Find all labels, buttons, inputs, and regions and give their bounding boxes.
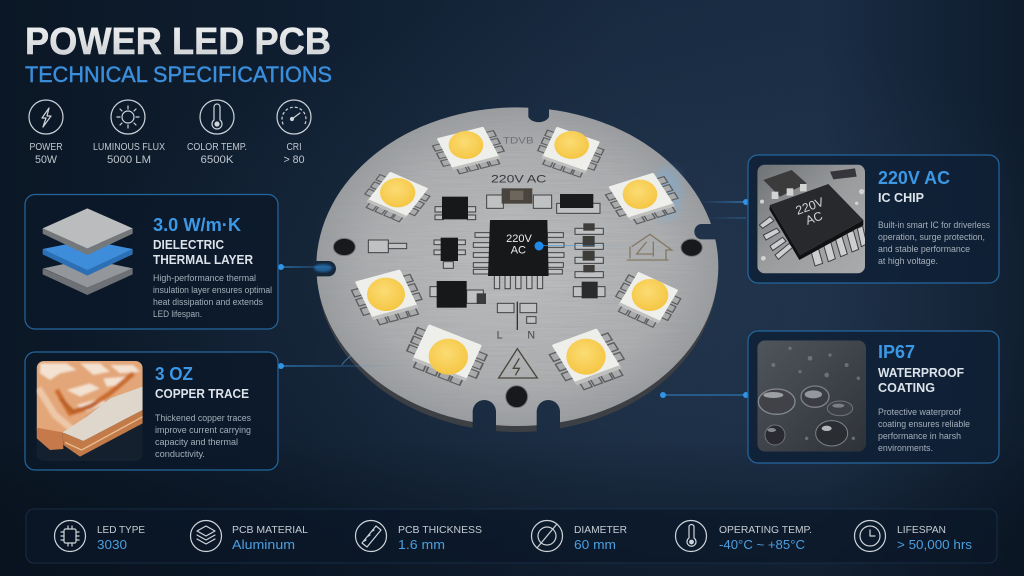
L N labels [497, 329, 535, 341]
board marking: TDVB [503, 135, 534, 145]
description: insulation layer ensures optimal [153, 285, 272, 295]
spec: power [29, 100, 63, 166]
subtitle: TECHNICAL SPECIFICATIONS [25, 62, 332, 87]
panel: waterproof coating: COATING [878, 380, 935, 395]
description [878, 407, 970, 453]
spec: diameter: 60 mm [574, 537, 616, 552]
panel: copper trace: 3 OZ [155, 364, 193, 384]
spec: PCB material: Aluminum [232, 537, 295, 552]
panel: dielectric thermal layer: THERMAL LAYER [153, 252, 254, 267]
description: operation, surge protection, [878, 232, 985, 242]
description [153, 273, 272, 319]
top specifications row [29, 100, 311, 166]
IC chip: AC [511, 244, 526, 256]
L N labels: N [527, 329, 535, 341]
description: High-performance thermal [153, 273, 256, 283]
L N labels: L [497, 329, 503, 341]
LEDs [348, 124, 685, 393]
IC chip: 220V [506, 233, 532, 245]
spec: LED type: LED TYPE [97, 524, 145, 536]
icon: chip [54, 520, 86, 552]
spec: color temperature: COLOR TEMP. [187, 142, 247, 153]
spec: PCB thickness: PCB THICKNESS [398, 524, 482, 536]
description [878, 220, 990, 266]
photo: copper trace [37, 361, 143, 461]
description: Protective waterproof [878, 407, 961, 417]
spec: LED type [54, 520, 145, 552]
house mark [627, 234, 672, 260]
panel: IC chip: 220V AC [878, 168, 950, 188]
panel: IC chip [748, 155, 999, 283]
icon: thermometer [200, 100, 234, 134]
panel: dielectric thermal layer [25, 194, 278, 329]
PCB board [310, 100, 730, 443]
description: conductivity. [155, 449, 205, 459]
title: POWER LED PCB [25, 21, 331, 63]
description: improve current carrying [155, 425, 251, 435]
panel: dielectric thermal layer: 3.0 W/m·K [153, 215, 241, 235]
connector: waterproof coating [660, 392, 749, 398]
spec: PCB thickness [356, 520, 482, 552]
icon: layer stack [43, 208, 133, 295]
icon: sun [111, 100, 145, 134]
description: performance in harsh [878, 431, 961, 441]
description [155, 413, 251, 459]
spec: color temperature: 6500K [200, 154, 234, 166]
spec: PCB thickness: 1.6 mm [398, 537, 445, 552]
blue glow on board [652, 167, 682, 220]
description: environments. [878, 443, 933, 453]
board body [310, 100, 730, 443]
spec: lifespan: LIFESPAN [897, 524, 946, 536]
description: capacity and thermal [155, 437, 238, 447]
description: heat dissipation and extends [153, 297, 263, 307]
icon: thermometer [676, 520, 706, 552]
photo: IC chip: 220V [794, 195, 826, 218]
panel: copper trace: COPPER TRACE [155, 386, 249, 401]
spec: luminous flux: 5000 LM [107, 154, 151, 166]
spec: LED type: 3030 [97, 537, 127, 552]
spec: luminous flux [93, 100, 165, 166]
spec: power: 50W [35, 154, 58, 166]
spec: lifespan [854, 520, 973, 552]
spec: operating temperature: -40°C ~ +85°C [719, 537, 805, 552]
spec: operating temperature: OPERATING TEMP. [719, 524, 812, 536]
connector: IC chip [534, 199, 749, 250]
spec: luminous flux: LUMINOUS FLUX [93, 142, 165, 153]
warning triangle [499, 349, 537, 378]
small components [368, 188, 605, 330]
spec: PCB material: PCB MATERIAL [232, 524, 308, 536]
panel: copper trace [25, 352, 278, 470]
spec: lifespan: > 50,000 hrs [897, 537, 973, 552]
spec: CRI [277, 100, 311, 166]
description: LED lifespan. [153, 309, 202, 319]
spec: CRI: CRI [286, 142, 302, 153]
board label: 220V AC [491, 173, 547, 185]
panel: IC chip: IC CHIP [878, 190, 924, 205]
description: and stable performance [878, 244, 970, 254]
icon: clock [854, 520, 886, 552]
panel: dielectric thermal layer: DIELECTRIC [153, 237, 225, 252]
spec: CRI: > 80 [284, 154, 304, 166]
IC chip [473, 220, 564, 289]
photo: IC chip [757, 165, 867, 273]
description: Built-in smart IC for driverless [878, 220, 990, 230]
description: coating ensures reliable [878, 419, 970, 429]
description: Thickened copper traces [155, 413, 251, 423]
spec: operating temperature [676, 520, 812, 552]
photo: IC chip: AC [804, 209, 825, 228]
connector: dielectric layer [278, 264, 341, 272]
mounting holes [333, 238, 702, 408]
icon: gauge [277, 100, 311, 134]
spec: diameter: DIAMETER [574, 524, 627, 536]
spec: diameter [532, 520, 627, 552]
icon: diameter [532, 520, 562, 552]
panel: waterproof coating: WATERPROOF [878, 365, 964, 380]
description: at high voltage. [878, 256, 938, 266]
panel: waterproof coating: IP67 [878, 342, 915, 362]
connector: copper trace [278, 355, 396, 369]
spec: color temperature [187, 100, 247, 166]
bottom specification bar [26, 509, 997, 563]
icon: layers [190, 520, 222, 552]
spec: power: POWER [30, 142, 62, 153]
icon: lightning bolt [29, 100, 63, 134]
spec: PCB material [190, 520, 308, 552]
icon: ruler [356, 520, 386, 552]
panel: waterproof coating [748, 331, 999, 463]
photo: water droplets [757, 340, 866, 452]
